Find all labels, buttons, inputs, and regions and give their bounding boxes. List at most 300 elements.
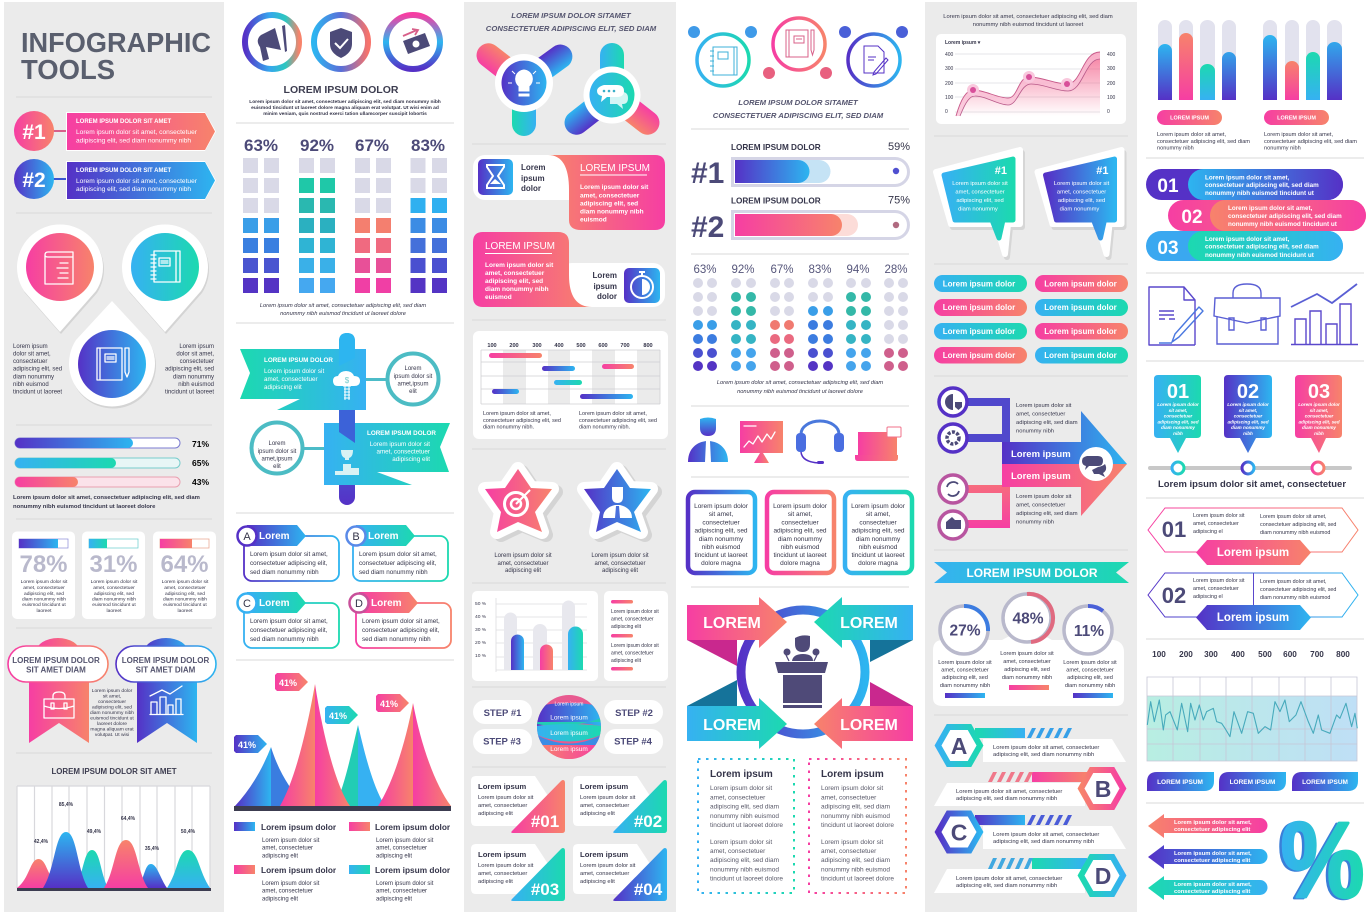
- text frame pink: nibh euismod: [781, 544, 820, 551]
- ribbon heading: [934, 562, 1129, 583]
- mountain legend: adipiscing elit: [262, 896, 298, 902]
- arrow hub diagram: [687, 597, 913, 749]
- left arrow 2: consectetuer adipiscing elit: [1174, 858, 1250, 864]
- speech bubble 2: [1038, 150, 1124, 257]
- hex banner C: [938, 814, 1126, 850]
- text frame teal: sit amet,: [866, 511, 890, 518]
- pin: book: [17, 224, 104, 334]
- mountain legend: adipiscing elit: [262, 854, 298, 860]
- corner card #04: [573, 844, 667, 901]
- signpost: elit: [409, 389, 417, 395]
- corner card #04: Lorem ipsum dolor sit: [580, 863, 636, 869]
- card: stopwatch: LOREM IPSUM: [485, 241, 555, 252]
- donut 48%: [1003, 594, 1051, 642]
- star captions: adipiscing elit: [602, 568, 638, 574]
- callout D: [350, 592, 451, 648]
- pin tag 01: consectetuer: [1164, 414, 1193, 418]
- hex card 01: Lorem ipsum: [1217, 547, 1289, 559]
- signpost: elit: [273, 464, 281, 470]
- step pills: STEP #3: [483, 736, 521, 748]
- hex card 02: Lorem ipsum dolor sit amet,: [1260, 579, 1327, 585]
- mountain legend: adipiscing elit: [376, 854, 412, 860]
- bar chart card: 50 %: [475, 601, 487, 607]
- callout D: consectetuer adipiscing elit,: [362, 627, 440, 634]
- progress caption: nonummy nibh euismod tincidunt ut laoreet dolore: [13, 504, 156, 510]
- gantt chart card: 200: [509, 343, 519, 349]
- line chart card: 300: [945, 66, 954, 72]
- corner card #02: Lorem ipsum: [580, 782, 628, 791]
- bar chart notes: amet, consectetuer: [611, 616, 654, 622]
- chart: bell curves: 64,4%: [121, 816, 136, 822]
- gantt chart card: 500: [576, 343, 586, 349]
- ranked banner #1: adipiscing elit, sed diam nonummy nibh: [76, 138, 191, 144]
- callout A: sed diam nonummy nibh: [250, 569, 319, 576]
- icon: document outline: [1149, 287, 1203, 345]
- mountain legend: Lorem ipsum dolor sit: [376, 881, 434, 887]
- gantt chart card: consectetuer adipiscing elit, sed: [579, 418, 657, 424]
- star captions: amet, consectetuer: [594, 561, 646, 567]
- ribbon heading: LOREM IPSUM DOLOR: [966, 566, 1098, 580]
- stat card 78%: adipiscing elit, sed: [24, 591, 64, 597]
- text frame pink: [767, 492, 834, 573]
- gradient label pills: Lorem ipsum dolor: [943, 327, 1015, 336]
- mountain chart: 41%: [380, 699, 398, 709]
- gantt chart card: diam nonummy nibh.: [579, 424, 631, 430]
- numbered pill 03: Lorem ipsum dolor sit amet,: [1205, 236, 1290, 243]
- branching arrow diagram: amet, consectetuer: [1016, 502, 1065, 508]
- progress bars: 71%: [192, 439, 209, 449]
- pin text right: Lorem ipsum: [179, 344, 214, 350]
- donut panel: Lorem ipsum dolor sit: [1000, 651, 1054, 657]
- ribbon centre text: magna aliquam erat: [90, 726, 134, 732]
- line chart card: Lorem ipsum ▾: [945, 40, 981, 46]
- stat card 31%: Lorem ipsum dolor sit: [91, 579, 138, 585]
- ribbon: chart: SIT AMET DIAM: [136, 666, 196, 674]
- numbered pill 01: 01: [1157, 176, 1179, 197]
- stat card 64%: 64%: [160, 551, 209, 578]
- dot pictogram: [693, 278, 908, 371]
- corner card #03: adipiscing elit: [478, 879, 513, 885]
- bar chart card: 20 %: [475, 640, 487, 646]
- pin tag 03: [1295, 375, 1342, 453]
- donut panel: adipiscing elit, sed: [942, 675, 988, 681]
- ribbon: chart: LOREM IPSUM DOLOR: [122, 656, 209, 665]
- stat card 64%: Lorem ipsum dolor sit: [162, 579, 209, 585]
- line area chart: 600: [1283, 650, 1297, 659]
- sign icons: [333, 371, 360, 386]
- callout A: A: [243, 531, 251, 543]
- pin tag 03: diam nonummy: [1302, 425, 1336, 430]
- arrow bottom-right: [814, 698, 913, 749]
- stat card 64%: laoreet: [178, 608, 193, 614]
- mountain legend: amet, consectetuer: [262, 888, 313, 894]
- progress bars: 43%: [192, 477, 209, 487]
- ranked banner #2: LOREM IPSUM DOLOR SIT AMET: [76, 168, 171, 174]
- left arrow 1: Lorem ipsum dolor sit amet,: [1174, 820, 1252, 826]
- dot caption: nonummy nibh euismod tincidunt ut laoreet dolore: [737, 389, 863, 395]
- capsule labels: Lorem ipsum dolor sit amet,: [1264, 132, 1333, 138]
- callout D: sed diam nonummy nibh: [362, 636, 431, 643]
- rank #2 progress: 75%: [888, 194, 910, 206]
- donut panel: diam nonummy nibh: [1065, 683, 1115, 689]
- speech bubble 2: diam nonummy: [1060, 206, 1099, 212]
- line chart card: 400: [1107, 52, 1116, 58]
- callout A: consectetuer adipiscing elit,: [250, 560, 328, 567]
- stat card 31%: [82, 532, 145, 619]
- gradient label pills: Lorem ipsum dolor: [1044, 327, 1117, 336]
- donut panel: diam nonummy nibh: [1002, 675, 1052, 681]
- pin tag 02: adipiscing elit, sed: [1227, 420, 1269, 424]
- pin text left: dolor sit amet,: [13, 352, 51, 358]
- chart: bell curves: [17, 786, 211, 891]
- bar chart notes: amet, consectetuer: [611, 650, 654, 656]
- gantt chart card: consectetuer adipiscing elit, sed: [483, 418, 561, 424]
- hex card 02: 02: [1162, 583, 1186, 608]
- dot percent labels: [693, 264, 908, 276]
- tab labels: LOREM IPSUM: [1302, 779, 1348, 786]
- sign 1: [240, 349, 366, 410]
- callout D: Lorem: [371, 598, 402, 609]
- chart: bell curves: 85,4%: [59, 802, 74, 808]
- corner card #04: #04: [634, 880, 663, 899]
- line area chart: 700: [1310, 650, 1324, 659]
- corner card #01: adipiscing elit: [478, 811, 513, 817]
- mountain legend: amet, consectetuer: [376, 846, 427, 852]
- icon: monitor: [740, 421, 783, 463]
- icon: briefcase outline: [1214, 284, 1280, 344]
- signpost: adipiscing elit: [264, 384, 302, 391]
- chat icon: [1082, 456, 1106, 477]
- left arrow 3: Lorem ipsum dolor sit amet,: [1174, 882, 1252, 888]
- hex banner D: [934, 857, 1123, 894]
- pin: notebook and pencil: [69, 301, 156, 409]
- pin text right: diam nonummy: [173, 374, 214, 380]
- branching arrow diagram: Lorem ipsum: [1011, 471, 1071, 482]
- mountain legend: Lorem ipsum dolor sit: [262, 838, 320, 844]
- line chart card: 100: [1107, 95, 1116, 101]
- speech bubble 1: [936, 150, 1022, 257]
- column 5 intro text: Lorem ipsum dolor sit amet, consectetuer adipiscing elit, sed diam: [943, 14, 1113, 20]
- card: stopwatch: dolor: [597, 292, 617, 301]
- card: stopwatch: euismod: [485, 294, 512, 301]
- dashed text box left: amet, consectetuer: [710, 794, 766, 802]
- text frame teal: tincidunt ut laoreet: [851, 552, 905, 559]
- branching arrow diagram: [939, 388, 1127, 539]
- card: hourglass: euismod: [580, 216, 607, 224]
- ribbon centre text: consectetuer: [98, 699, 126, 705]
- text frame teal: [845, 492, 912, 573]
- icon ring: megaphone: [245, 15, 299, 69]
- tab labels: LOREM IPSUM: [1230, 779, 1275, 786]
- callout A: [238, 525, 339, 581]
- numbered pill 02: Lorem ipsum dolor sit amet,: [1228, 205, 1313, 212]
- card: stopwatch: diam nonummy nibh: [485, 286, 549, 293]
- callout B: Lorem: [368, 531, 399, 542]
- arrow hub diagram: LOREM: [840, 717, 898, 734]
- grid caption: Lorem ipsum dolor sit amet, consectetuer adipiscing elit, sed diam: [260, 303, 426, 309]
- rank #2 progress: LOREM IPSUM DOLOR: [731, 196, 821, 206]
- line chart card: 100: [945, 95, 954, 101]
- corner card #03: Lorem ipsum: [478, 850, 526, 859]
- gradient label pills: Lorem ipsum dolor: [1044, 280, 1117, 288]
- bar chart notes: [604, 591, 668, 681]
- rank #1 progress: #1: [691, 157, 724, 190]
- text frame teal: Lorem ipsum dolor: [851, 503, 906, 510]
- gantt chart card: 700: [620, 343, 630, 349]
- grid caption: nonummy nibh euismod tincidunt ut laoreet dolore: [280, 311, 406, 317]
- hex banner D: Lorem ipsum dolor sit amet, consectetuer: [956, 876, 1062, 882]
- signpost: Lorem ipsum dolor sit: [370, 441, 430, 448]
- mountain legend: amet, consectetuer: [262, 846, 313, 852]
- pin text left: consectetuer: [13, 359, 47, 365]
- gantt chart card: [473, 331, 668, 439]
- dashed text box right: amet, consectetuer: [821, 848, 877, 855]
- bar chart notes: Lorem ipsum dolor sit: [611, 643, 659, 649]
- step pills: STEP #4: [614, 736, 653, 748]
- panel paragraph: euismod tincidunt ut laoreet dolore magna aliquam erat volutpat. Ut wisi enim ad: [251, 105, 439, 111]
- ribbon: briefcase: SIT AMET DIAM: [26, 666, 86, 674]
- square pictogram grid: [243, 158, 447, 293]
- dashed text box right: nonummy nibh euismod: [821, 813, 890, 820]
- dashed text box left: tincidunt ut laoreet dolore: [710, 822, 783, 829]
- gantt chart card: diam nonummy nibh.: [483, 424, 535, 430]
- corner card #02: adipiscing elit: [580, 811, 615, 817]
- pin text left: adipiscing elit, sed: [13, 367, 62, 373]
- text frame pink: adipiscing elit, sed: [773, 528, 827, 534]
- text frame pink: dolore magna: [780, 560, 820, 567]
- callout D: Lorem ipsum dolor sit amet,: [362, 618, 440, 625]
- chart: bell curves: 50,4%: [181, 829, 196, 835]
- ranked banner #2: [14, 159, 216, 200]
- timeline: [1148, 462, 1352, 489]
- speech bubble 1: diam nonummy: [958, 206, 998, 212]
- gantt chart card: 300: [532, 343, 542, 349]
- text frame purple: consectetuer: [702, 520, 740, 526]
- percent labels: [244, 136, 445, 155]
- card: stopwatch: [473, 232, 665, 307]
- pin tag 01: [1154, 375, 1201, 453]
- signpost: amet, consectetuer: [376, 448, 430, 456]
- timeline: Lorem ipsum dolor sit amet, consectetuer: [1158, 479, 1347, 489]
- corner card #01: amet, consectetuer: [478, 803, 527, 809]
- percent labels: 63%: [244, 136, 278, 155]
- pin tag 02: Lorem ipsum dolor: [1227, 402, 1269, 407]
- donut panel: adipiscing elit, sed: [1004, 667, 1050, 673]
- dashed text box right: Lorem ipsum: [821, 769, 884, 780]
- circle callout bottom: [252, 422, 302, 474]
- icon: laptop: [855, 427, 901, 461]
- chart heading: LOREM IPSUM DOLOR SIT AMET: [51, 767, 177, 776]
- arrow top-right: [814, 597, 913, 648]
- signpost: LOREM IPSUM DOLOR: [264, 357, 333, 364]
- signpost: Lorem ipsum dolor sit: [264, 368, 324, 375]
- numbered pill 02: nonummy nibh euismod tincidunt ut: [1228, 221, 1338, 228]
- dot percent labels: 94%: [846, 264, 870, 276]
- corner card #02: amet, consectetuer: [580, 803, 629, 809]
- hex card 02: Lorem ipsum dolor sit: [1193, 578, 1245, 584]
- signpost: Lorem: [268, 441, 286, 447]
- corner card #01: #01: [531, 812, 559, 831]
- mountain legend: Lorem ipsum dolor: [375, 822, 451, 832]
- dashed text box left: amet, consectetuer: [710, 848, 766, 855]
- dashed text box left: Lorem ipsum dolor sit: [710, 839, 772, 846]
- arrow hub diagram: LOREM: [703, 615, 761, 632]
- ribbon centre text: laoreet dolore: [97, 721, 127, 727]
- line area chart: 500: [1258, 650, 1272, 659]
- bar chart card: 30 %: [475, 627, 487, 633]
- pin text left: tincidunt ut laoreet: [13, 389, 62, 395]
- callout B: consectetuer adipiscing elit,: [359, 560, 437, 567]
- left arrow 2: [1148, 845, 1268, 869]
- card: stopwatch: ipsum: [593, 282, 617, 291]
- dashed text box right: amet, consectetuer: [821, 794, 877, 802]
- capsule labels: consectetuer adipiscing elit, sed diam: [1264, 139, 1357, 145]
- left arrow 1: [1148, 814, 1268, 838]
- bar chart card: [472, 591, 598, 681]
- corner card #03: [471, 844, 565, 901]
- gradient label pills: [934, 275, 1128, 364]
- arrow bottom-left: [687, 698, 787, 749]
- ranked banner #2: Lorem ipsum dolor sit amet, consectetuer: [76, 178, 198, 185]
- branching arrow diagram: nonummy nibh: [1016, 428, 1054, 434]
- mountain legend: Lorem ipsum dolor sit: [262, 881, 320, 887]
- numbered pill 01: nonummy nibh euismod tincidunt ut: [1205, 190, 1315, 197]
- hex card 02: Lorem ipsum: [1217, 612, 1289, 624]
- numbered pill 03: nonummy nibh euismod tincidunt ut: [1205, 252, 1315, 259]
- icon ring: shield: [314, 15, 368, 69]
- speech bubble 2: amet, consectetuer: [1057, 190, 1106, 196]
- star captions: amet, consectetuer: [497, 561, 549, 567]
- progress bars: [15, 438, 209, 487]
- branching arrow diagram: amet, consectetuer: [1016, 412, 1065, 418]
- bar chart card: 40 %: [475, 614, 487, 620]
- stat card 31%: euismod tincidunt ut: [92, 602, 136, 608]
- line area chart: 400: [1231, 650, 1245, 659]
- dashed text box left: [698, 759, 794, 893]
- mountain legend: Lorem ipsum dolor sit: [376, 838, 434, 844]
- hex banner B: Lorem ipsum dolor sit amet, consectetuer: [956, 789, 1062, 795]
- ribbon centre text: Lorem ipsum dolor: [92, 688, 133, 694]
- branching arrow diagram: nonummy nibh: [1016, 520, 1054, 526]
- hex card 02: amet, consectetuer: [1193, 586, 1239, 592]
- line area chart: 300: [1204, 650, 1218, 659]
- pin tag 01: sit amet,: [1169, 408, 1187, 413]
- donut panel: Lorem ipsum dolor sit: [938, 660, 992, 666]
- callout C: consectetuer adipiscing elit,: [250, 627, 328, 634]
- callout C: Lorem ipsum dolor sit amet,: [250, 618, 328, 625]
- left arrow 2: Lorem ipsum dolor sit amet,: [1174, 851, 1252, 857]
- dashed text box left: adipiscing elit, sed diam: [710, 857, 779, 864]
- ribbon: chart: [116, 638, 216, 743]
- speech bubble 1: amet, consectetuer: [955, 190, 1005, 196]
- line chart card: 200: [1107, 81, 1116, 87]
- corner card #03: Lorem ipsum dolor sit: [478, 863, 534, 869]
- donut 11%: [1064, 606, 1112, 654]
- dot caption: Lorem ipsum dolor sit amet, consectetuer adipiscing elit, sed diam: [717, 380, 883, 386]
- hex card 02: consectetuer adipiscing elit, sed: [1260, 587, 1336, 593]
- dashed text box left: nonummy nibh euismod: [710, 866, 779, 874]
- stat card 78%: euismod tincidunt ut: [22, 602, 66, 608]
- arrow hub diagram: LOREM: [703, 717, 761, 734]
- ranked banner #1: [14, 111, 216, 151]
- donut panel: amet, consectetuer: [941, 668, 989, 674]
- mountain legend: Lorem ipsum dolor: [261, 865, 337, 875]
- callout A: Lorem ipsum dolor sit amet,: [250, 551, 328, 558]
- capsule bars group 2: [1263, 20, 1342, 100]
- branching arrow diagram: adipiscing elit, sed diam: [1016, 420, 1078, 426]
- stat card 78%: Lorem ipsum dolor sit: [21, 579, 68, 585]
- corner card #03: #03: [531, 880, 559, 899]
- corner card #02: #02: [634, 812, 662, 831]
- dashed text box right: Lorem ipsum dolor sit: [821, 839, 883, 846]
- branching arrow diagram: Lorem ipsum: [1011, 449, 1071, 460]
- gantt chart card: 100: [487, 343, 497, 349]
- arrow hub diagram: LOREM: [840, 615, 898, 632]
- numbered pill 01: consectetuer adipiscing elit, sed diam: [1205, 182, 1319, 189]
- pin tag 03: Lorem ipsum dolor: [1298, 402, 1340, 407]
- column 3 heading: LOREM IPSUM DOLOR SITAMET: [511, 11, 632, 20]
- signpost: amet,ipsum: [397, 382, 429, 388]
- star: person: [584, 469, 655, 535]
- dashed text box left: adipiscing elit, sed diam: [710, 804, 779, 810]
- text frame purple: [688, 492, 755, 573]
- column 4 heading: CONSECTETUER ADIPISCING ELIT, SED DIAM: [713, 111, 884, 120]
- text frame pink: diam nonummy: [778, 536, 823, 543]
- text frame purple: dolore magna: [701, 560, 741, 567]
- progress caption: Lorem ipsum dolor sit amet, consectetuer adipiscing elit, sed diam: [13, 495, 200, 501]
- pin tag 01: nibh: [1173, 431, 1183, 436]
- chart: bell curves: 49,4%: [87, 829, 102, 835]
- hex card 01: amet, consectetuer: [1193, 521, 1239, 527]
- line area chart: 200: [1179, 650, 1193, 659]
- ribbon: briefcase: [8, 638, 108, 743]
- card: hourglass: dolor: [521, 184, 541, 193]
- pin text right: dolor sit amet,: [176, 352, 214, 358]
- tab labels: [1147, 772, 1358, 791]
- numbered pill 03: 03: [1157, 238, 1179, 259]
- hex banner A: A: [951, 733, 967, 759]
- pin text left: diam nonummy: [13, 374, 54, 380]
- card: hourglass: diam nonummy nibh: [580, 208, 644, 216]
- rank #2 progress: [691, 194, 910, 244]
- stat card 31%: adipiscing elit, sed: [94, 591, 134, 597]
- signpost: ipsum dolor sit: [394, 374, 433, 380]
- card: stopwatch: amet, consectetuer: [485, 270, 545, 277]
- card: hourglass: Lorem ipsum dolor sit: [580, 184, 649, 191]
- numbered pill 02: consectetuer adipiscing elit, sed diam: [1228, 213, 1342, 220]
- panel paragraph: Lorem ipsum dolor sit amet, consectetuer adipiscing elit, sed diam nonummy nibh: [249, 99, 441, 105]
- card: stopwatch: Lorem: [593, 271, 617, 280]
- ranked banner #2: #2: [22, 169, 46, 192]
- gradient label pills: Lorem ipsum dolor: [1044, 303, 1117, 312]
- pin text left: nibh euismod: [13, 382, 49, 388]
- line chart card: 300: [1107, 66, 1116, 72]
- gradient label pills: Lorem ipsum dolor: [943, 303, 1015, 312]
- branching arrow diagram: adipiscing elit, sed diam: [1016, 511, 1078, 517]
- sign 2: [324, 423, 450, 485]
- callout C: sed diam nonummy nibh: [250, 636, 319, 643]
- corner card #01: Lorem ipsum dolor sit: [478, 795, 534, 801]
- percent labels: 92%: [300, 136, 334, 155]
- numbered pill 03: [1146, 231, 1343, 261]
- line area chart: [1147, 650, 1357, 761]
- chart: bell curves: 42,4%: [34, 839, 49, 845]
- card: hourglass: ipsum: [521, 174, 545, 183]
- line chart card: 0: [1107, 109, 1110, 115]
- stat card 78%: [12, 532, 75, 619]
- dashed text box right: Lorem ipsum dolor sit: [821, 785, 883, 792]
- text frame teal: nibh euismod: [859, 544, 898, 551]
